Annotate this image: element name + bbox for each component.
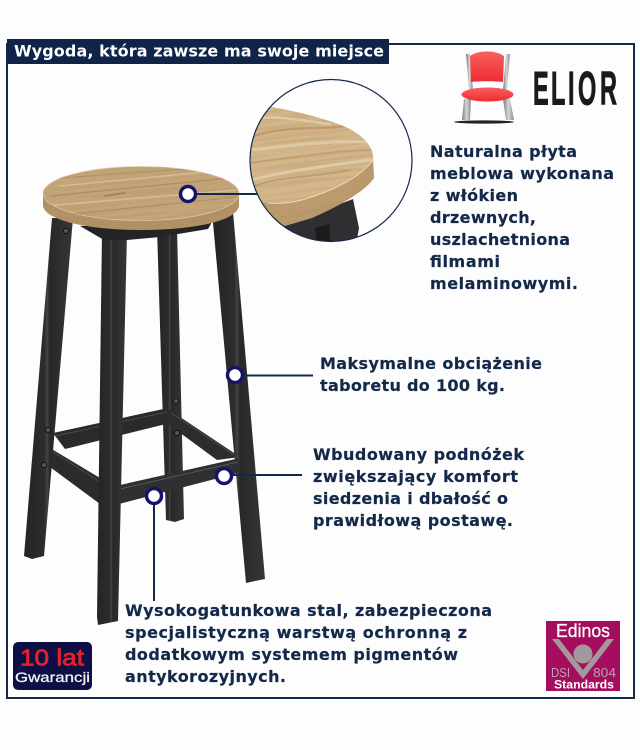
left footrest rail (40, 442, 100, 504)
text: maximum load: Maksymalne obciążenie (320, 354, 542, 373)
text: footrest (313, 445, 524, 530)
callout: steel (146, 488, 162, 601)
right footrest rail (168, 409, 240, 460)
text: steel: specjalistyczną warstwą ochronną z (125, 623, 467, 642)
badge: 10 years warranty: 10 lat (20, 644, 85, 670)
text: board description: drzewnych, (430, 208, 536, 227)
badge: Edinos standards: Edinos (556, 621, 610, 641)
text: footrest: Wbudowany podnóżek (313, 445, 524, 464)
badge: Edinos standards: DSI (551, 665, 570, 680)
text: footrest: siedzenia i dbałość o (313, 489, 508, 508)
badge: 10 years warranty: Gwarancji (15, 669, 90, 685)
under seat brackets (80, 222, 212, 240)
text: steel: antykorozyjnych. (125, 667, 286, 686)
text: steel (125, 601, 492, 686)
text: footrest: prawidłową postawę. (313, 511, 513, 530)
text: maximum load (320, 354, 542, 395)
logo wordmark: ELIOR (533, 61, 617, 115)
callout: footrest (216, 468, 302, 484)
callout: seat (180, 186, 257, 202)
badge: Edinos standards (546, 621, 620, 692)
front leg (97, 232, 127, 625)
text: maximum load: taboretu do 100 kg. (320, 376, 505, 395)
text: board description: filmami (430, 252, 500, 271)
logo: Elior (454, 52, 617, 124)
callout: load (228, 368, 313, 382)
text: board description: meblowa wykonana (430, 164, 614, 183)
zoom circle detail (249, 78, 413, 242)
text: board description: Naturalna płyta (430, 142, 577, 161)
right leg (212, 212, 265, 583)
icon: red chair (454, 52, 514, 124)
text: board description: z włókien (430, 186, 518, 205)
text: board description (430, 142, 614, 293)
stool illustration (24, 138, 265, 625)
text: steel: dodatkowym systemem pigmentów (125, 645, 458, 664)
badge: Edinos standards: 804 (593, 665, 616, 680)
frame screws (42, 228, 180, 468)
text: board description: uszlachetniona (430, 230, 570, 249)
text: footrest: zwiększający komfort (313, 467, 518, 486)
back rail (53, 408, 170, 449)
text: board description: melaminowymi. (430, 274, 578, 293)
front footrest rail (119, 458, 240, 504)
badge: 10 years warranty (13, 642, 92, 690)
back leg (157, 228, 184, 522)
text: steel: Wysokogatunkowa stal, zabezpieczona (125, 601, 492, 620)
seat (42, 166, 240, 230)
badge: Edinos standards: Standards (554, 678, 614, 692)
title: Wygoda, która zawsze ma swoje miejsce (14, 42, 384, 60)
left leg (24, 218, 73, 559)
